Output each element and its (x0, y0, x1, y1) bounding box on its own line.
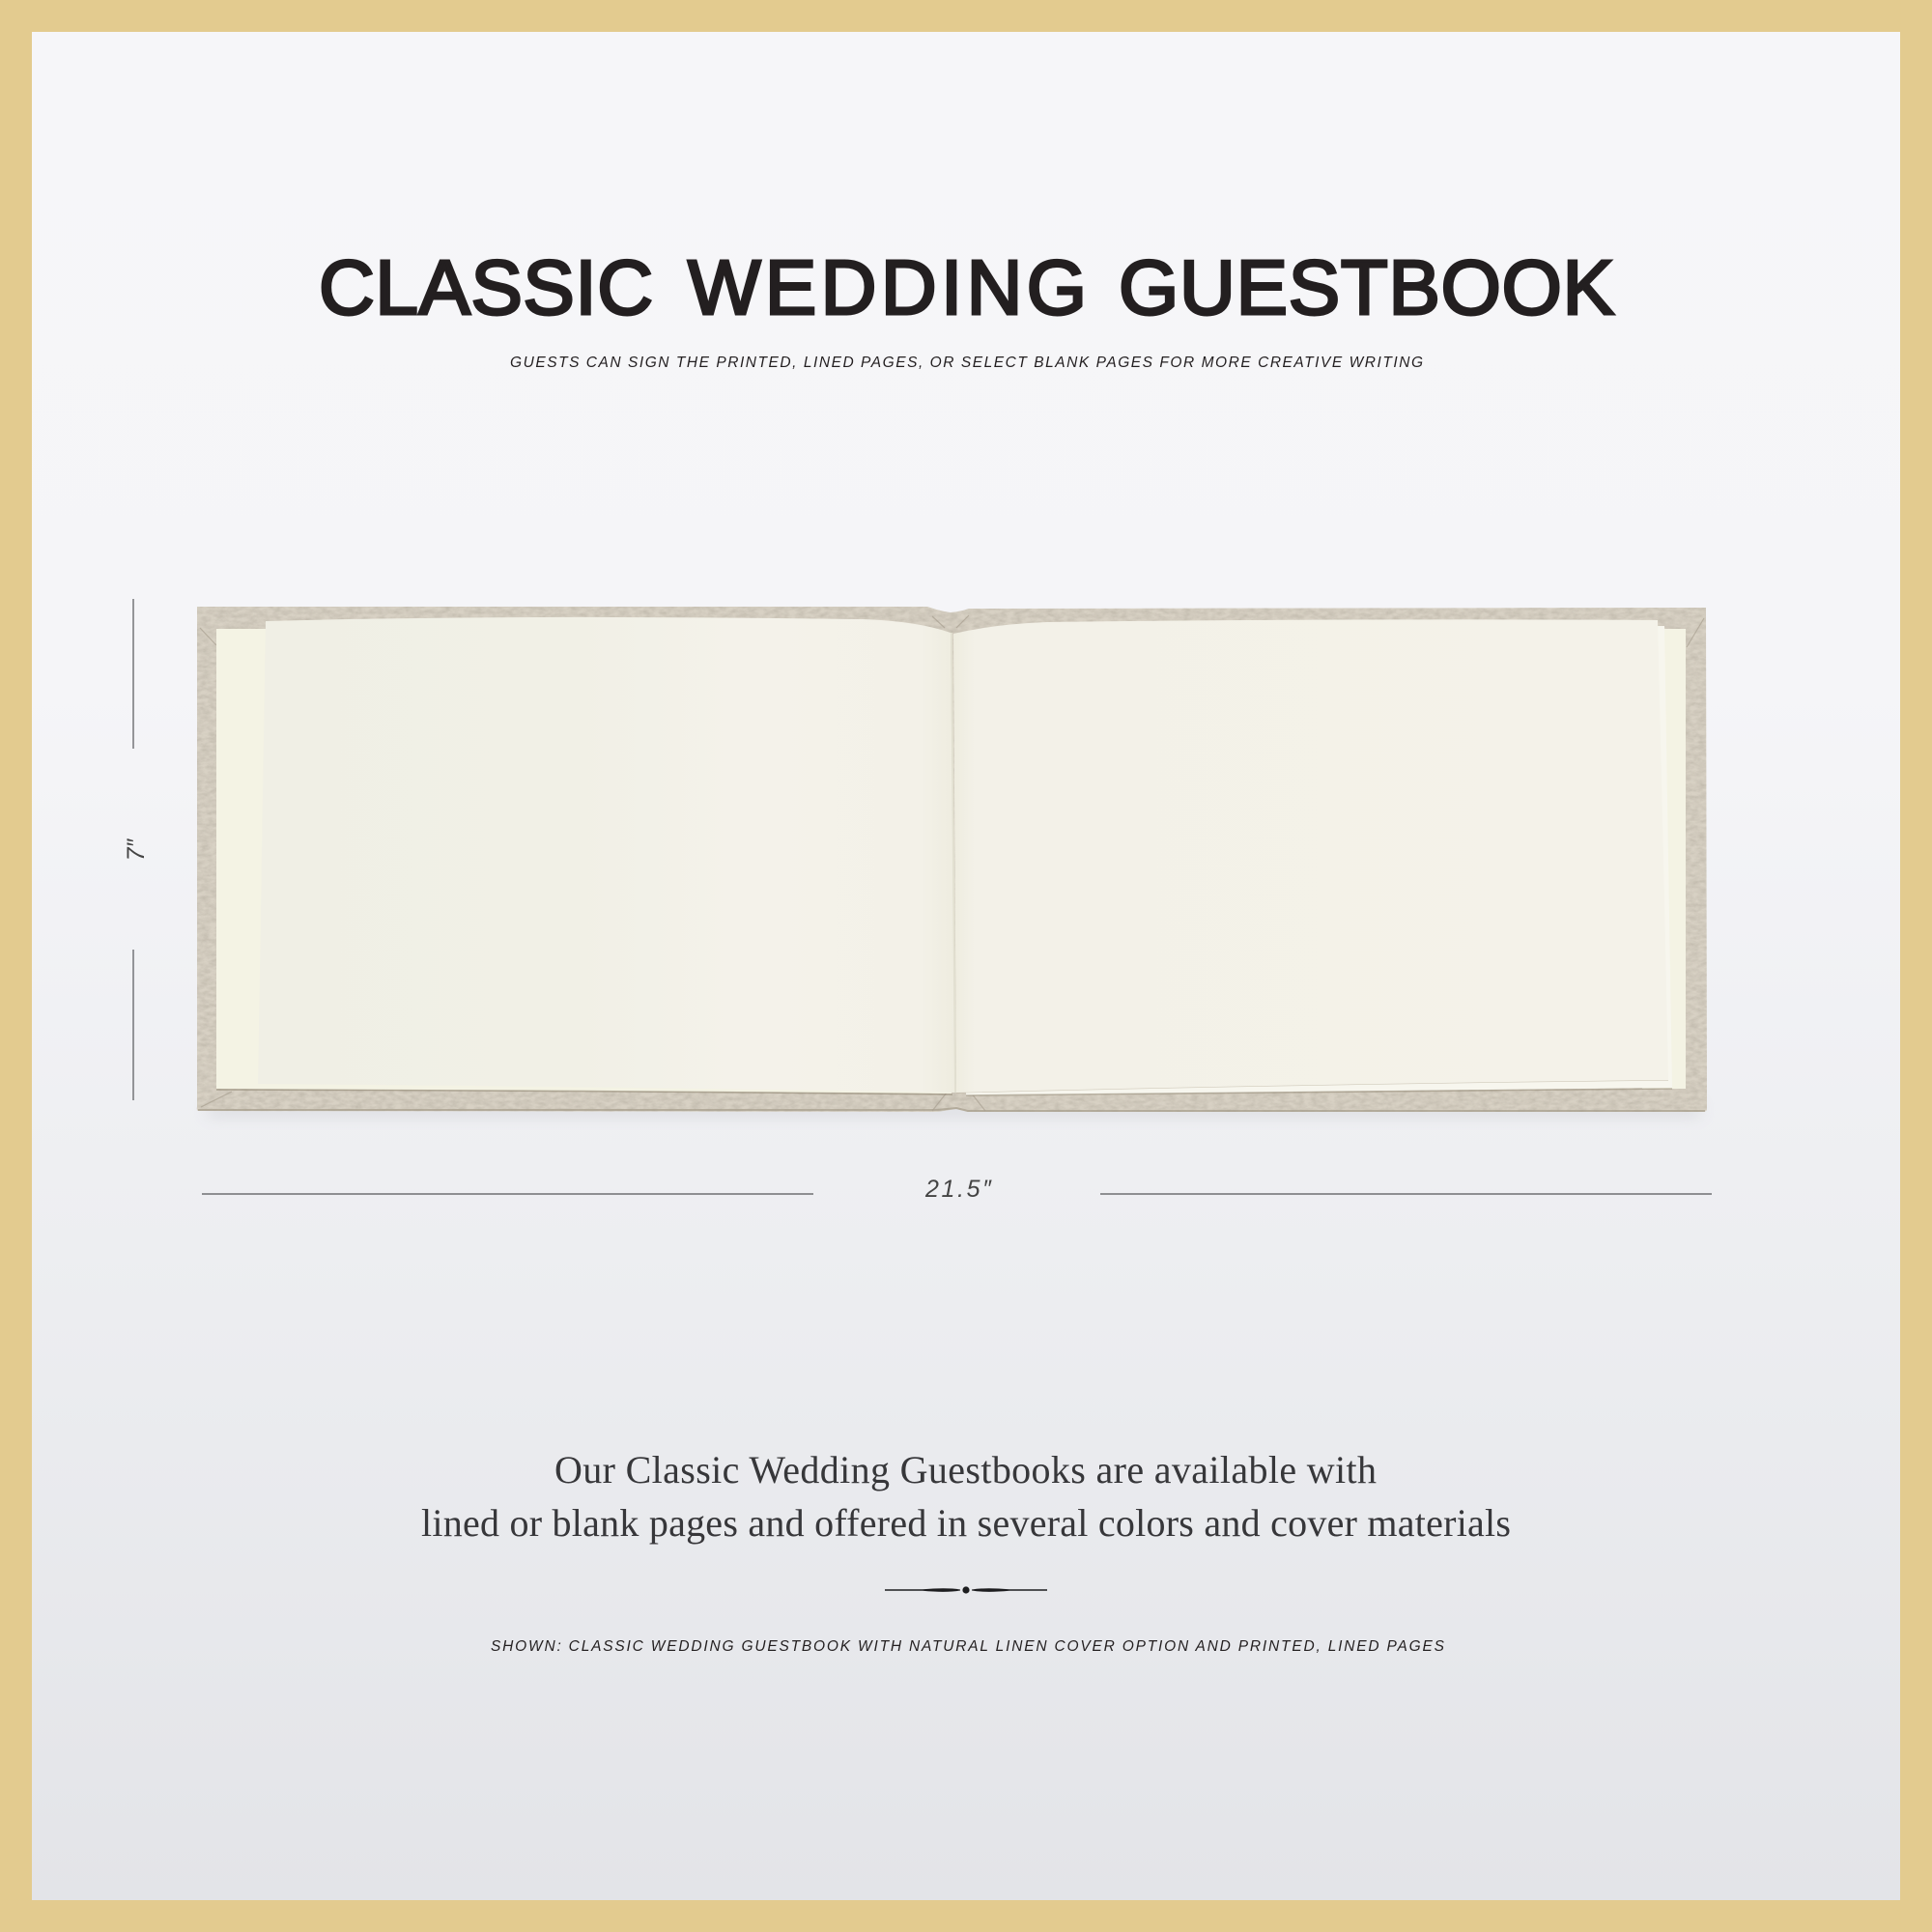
description text: Our Classic Wedding Guestbooks are available with (554, 1448, 1377, 1492)
open guestbook (197, 607, 1707, 1117)
height dimension: 7 inches: 7″ (123, 838, 150, 861)
title: GUESTBOOK (1119, 244, 1614, 330)
book shadow (208, 1103, 1700, 1117)
cover fold lines (200, 615, 1704, 1111)
spine gutter (952, 633, 955, 1093)
linen cover (197, 607, 1707, 1112)
right page (953, 619, 1668, 1093)
title: WEDDING (688, 244, 1087, 330)
cover bottom edge shading (198, 1108, 1705, 1111)
left page (258, 617, 955, 1093)
caption: SHOWN: CLASSIC WEDDING GUESTBOOK WITH NATURAL LINEN COVER OPTION AND PRINTED, LINED PAGES (491, 1638, 1445, 1655)
title (319, 244, 1614, 330)
ornament divider (885, 1586, 1047, 1594)
subtitle: GUESTS CAN SIGN THE PRINTED, LINED PAGES, OR SELECT BLANK PAGES FOR MORE CREATIVE WRITING (510, 355, 1423, 371)
title: CLASSIC (319, 244, 653, 330)
description text: lined or blank pages and offered in several colors and cover materials (421, 1501, 1511, 1545)
page shadow lines (216, 1090, 952, 1094)
description text (421, 1448, 1511, 1545)
left back page (216, 629, 952, 1094)
width dimension: 21.5 inches: 21.5″ (924, 1176, 992, 1203)
right back pages (1642, 629, 1686, 1089)
